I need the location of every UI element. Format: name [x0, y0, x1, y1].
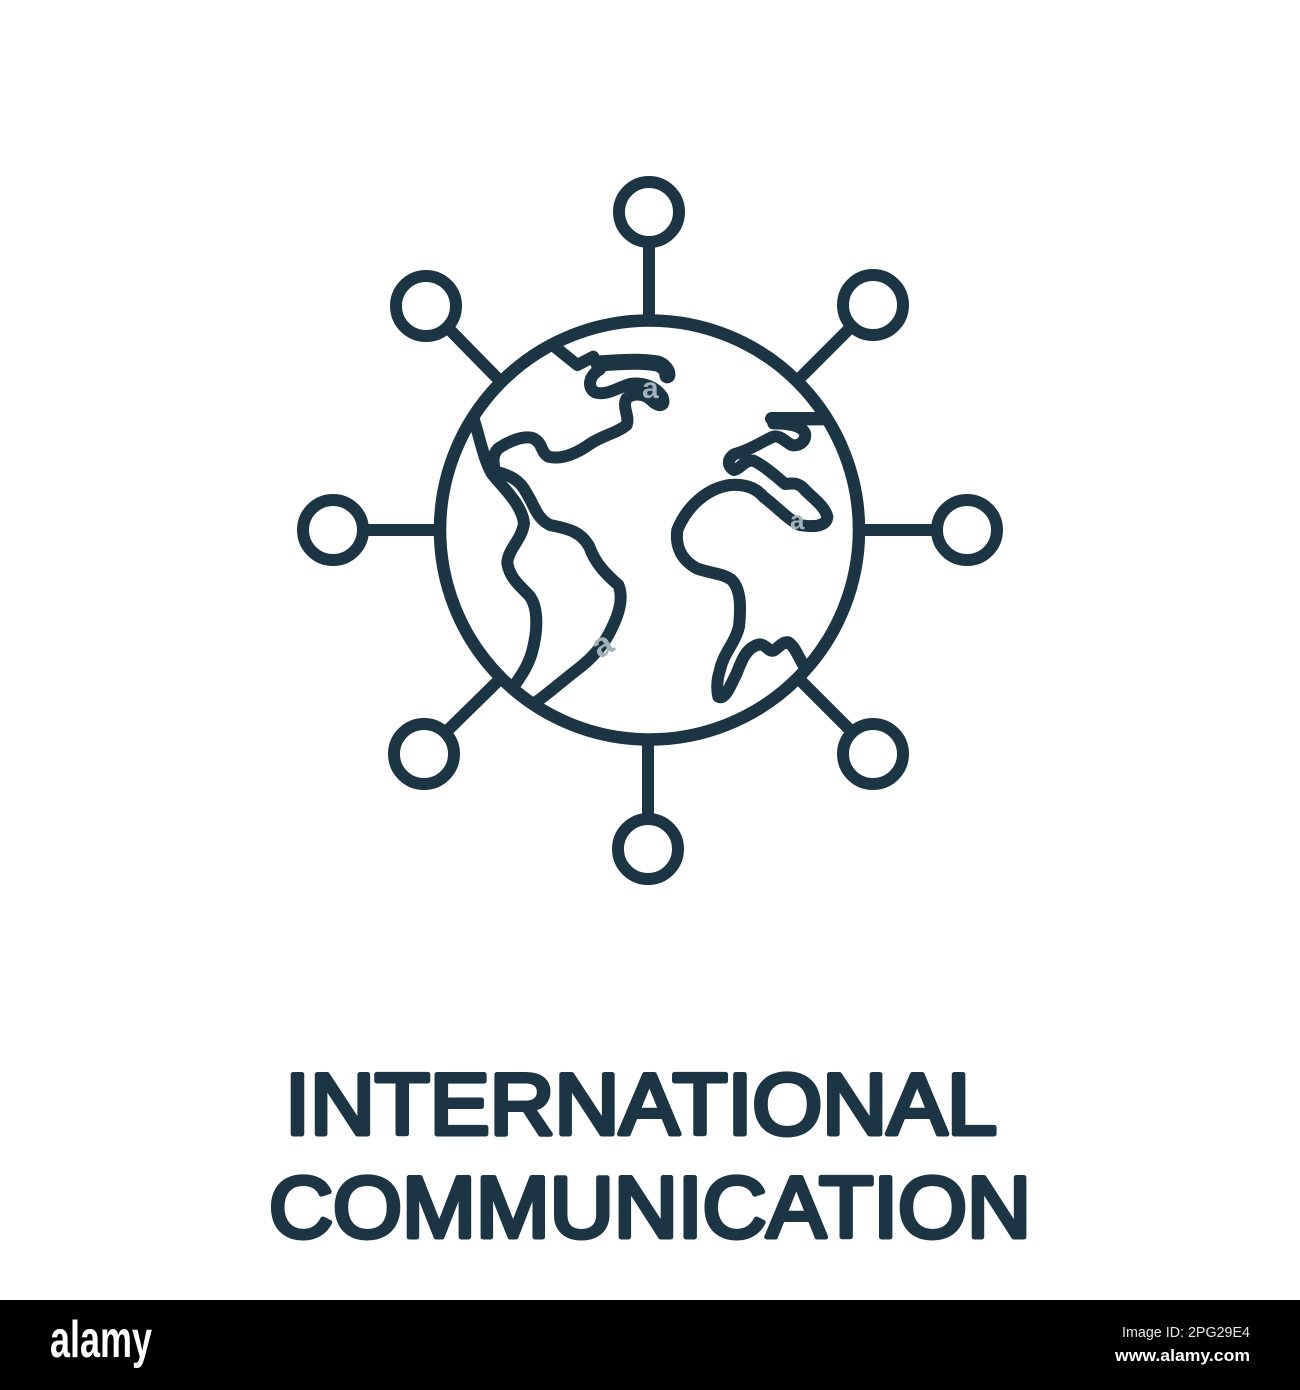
- footer logo: alamy: [50, 1311, 152, 1369]
- footer image id: Image ID: 2PG29E4: [1122, 1324, 1250, 1341]
- footer bar: [0, 1300, 1300, 1390]
- watermark fragments: a: [584, 623, 621, 666]
- icon: globe with connected nodes: [303, 182, 997, 879]
- title: [269, 1057, 1031, 1256]
- title line 2: COMMUNICATION: [269, 1160, 1031, 1256]
- watermark fragments: [584, 372, 805, 666]
- connector nodes ring: [303, 182, 997, 879]
- title line 1: INTERNATIONAL: [285, 1057, 997, 1153]
- globe continents: [474, 348, 827, 702]
- watermark fragments: a: [642, 372, 659, 405]
- footer url: www.alamy.com: [1114, 1346, 1250, 1365]
- globe outline: [440, 320, 859, 740]
- watermark fragments: a: [790, 505, 805, 535]
